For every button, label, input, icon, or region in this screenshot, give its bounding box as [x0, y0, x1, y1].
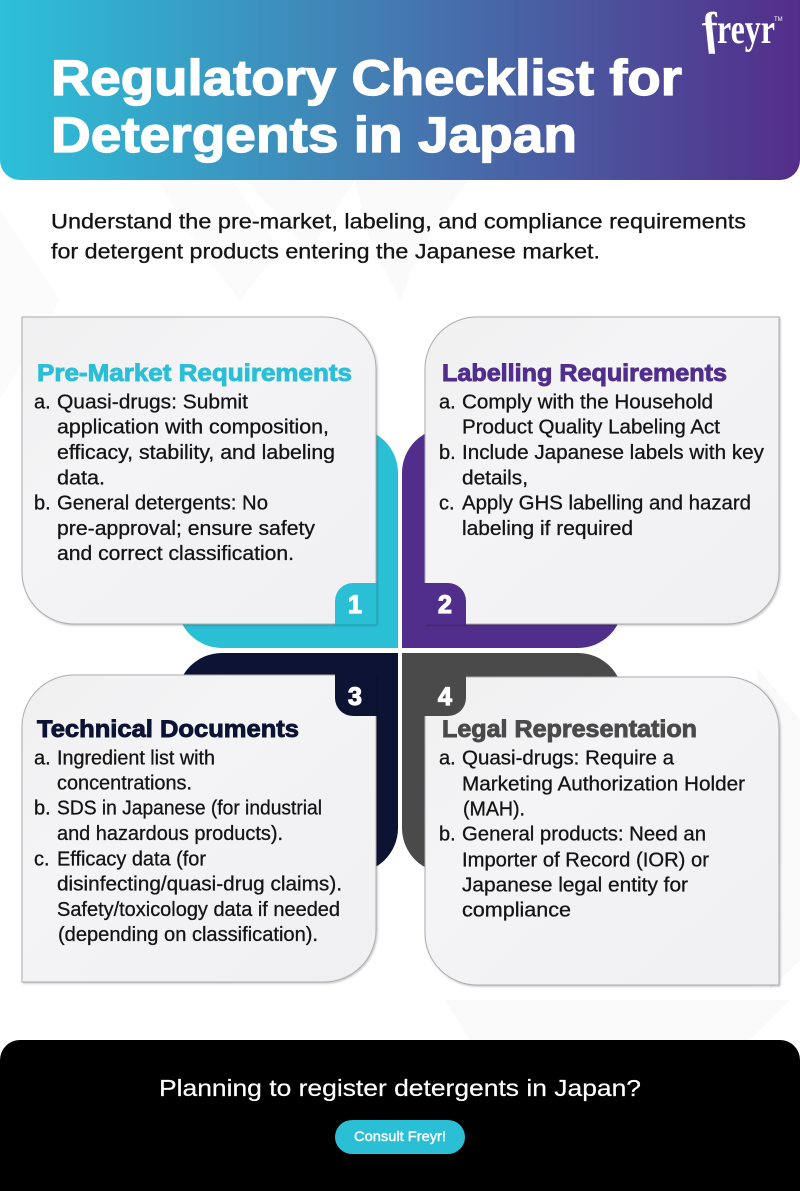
number tab 2: [424, 583, 466, 624]
list: details,: [462, 468, 528, 490]
list: efficacy, stability, and labeling: [57, 442, 335, 464]
button: Consult Freyr: [335, 1120, 465, 1154]
number tab 1: [335, 583, 376, 624]
heading: Labelling Requirements: [442, 360, 727, 387]
list: b.: [34, 798, 51, 820]
title: Regulatory Checklist for: [51, 50, 682, 106]
list: Efficacy data (for: [57, 849, 206, 871]
list: [34, 748, 342, 946]
number tab 2: 2: [438, 591, 452, 619]
list: concentrations.: [57, 773, 192, 795]
logo: freyr: f: [694, 4, 730, 55]
button: Consult Freyr: Consult Freyr!: [354, 1128, 446, 1144]
list: application with composition,: [57, 417, 329, 439]
heading: Legal Representation: [442, 716, 697, 743]
card: [22, 675, 376, 982]
logo: freyr: reyr: [717, 7, 775, 53]
list: [439, 392, 764, 540]
list: b.: [439, 442, 456, 464]
list: General detergents: No: [57, 493, 268, 515]
cyan backing shape: [177, 428, 398, 648]
list: c.: [34, 849, 50, 871]
list: [34, 392, 335, 565]
footer banner: [0, 1040, 800, 1191]
list: c.: [439, 493, 455, 515]
list: Importer of Record (IOR) or: [462, 850, 709, 872]
list: disinfecting/quasi-drug claims).: [57, 874, 342, 896]
list: and hazardous products).: [57, 823, 283, 845]
list: compliance: [462, 900, 571, 922]
title: Detergents in Japan: [51, 107, 577, 163]
heading: Pre-Market Requirements: [37, 360, 352, 387]
list: Ingredient list with: [57, 748, 215, 770]
panel: labelling requirements: [402, 317, 779, 648]
heading: Technical Documents: [37, 716, 299, 743]
list: (MAH).: [463, 799, 525, 821]
list: a.: [439, 748, 456, 770]
list: [439, 748, 745, 922]
list: Japanese legal entity for: [462, 875, 688, 897]
list: b.: [439, 824, 456, 846]
panel: pre-market requirements: [22, 317, 398, 648]
number tab 1: 1: [348, 591, 362, 619]
list: Include Japanese labels with key: [462, 442, 764, 464]
navy backing shape: [177, 653, 398, 873]
list: labeling if required: [462, 518, 633, 540]
card: [22, 317, 376, 624]
number tab 4: 4: [438, 683, 452, 711]
list: Quasi-drugs: Submit: [57, 392, 248, 414]
call to action text: Planning to register detergents in Japan?: [159, 1075, 641, 1101]
logo: freyr: [694, 4, 783, 55]
list: Safety/toxicology data if needed: [57, 899, 340, 921]
number tab 4: [424, 676, 466, 716]
list: a.: [34, 748, 51, 770]
panel: technical documents: [22, 653, 398, 982]
logo: freyr: TM: [774, 17, 783, 23]
list: Product Quality Labeling Act: [462, 417, 720, 439]
list: a.: [439, 392, 456, 414]
panel: legal representation: [402, 653, 779, 985]
number tab 3: 3: [348, 683, 362, 711]
card: [425, 677, 779, 985]
intro text: Understand the pre-market, labeling, and compliance requirements: [51, 211, 746, 234]
list: General products: Need an: [462, 824, 706, 846]
purple backing shape: [402, 428, 623, 648]
list: a.: [34, 392, 51, 414]
intro text: [51, 211, 746, 264]
list: and correct classification.: [57, 543, 294, 565]
intro text: for detergent products entering the Japanese market.: [51, 241, 600, 264]
list: Apply GHS labelling and hazard: [462, 493, 751, 515]
card: [425, 317, 779, 624]
number tab 3: [335, 674, 376, 716]
header banner: [0, 0, 800, 180]
title: [51, 50, 682, 163]
list: Comply with the Household: [462, 392, 713, 414]
list: SDS in Japanese (for industrial: [57, 798, 322, 820]
gray backing shape: [402, 653, 623, 873]
list: (depending on classification).: [58, 924, 318, 946]
list: b.: [34, 493, 51, 515]
list: Marketing Authorization Holder: [462, 774, 745, 796]
list: data.: [57, 468, 105, 490]
list: Quasi-drugs: Require a: [462, 748, 675, 770]
list: pre-approval; ensure safety: [57, 518, 315, 540]
